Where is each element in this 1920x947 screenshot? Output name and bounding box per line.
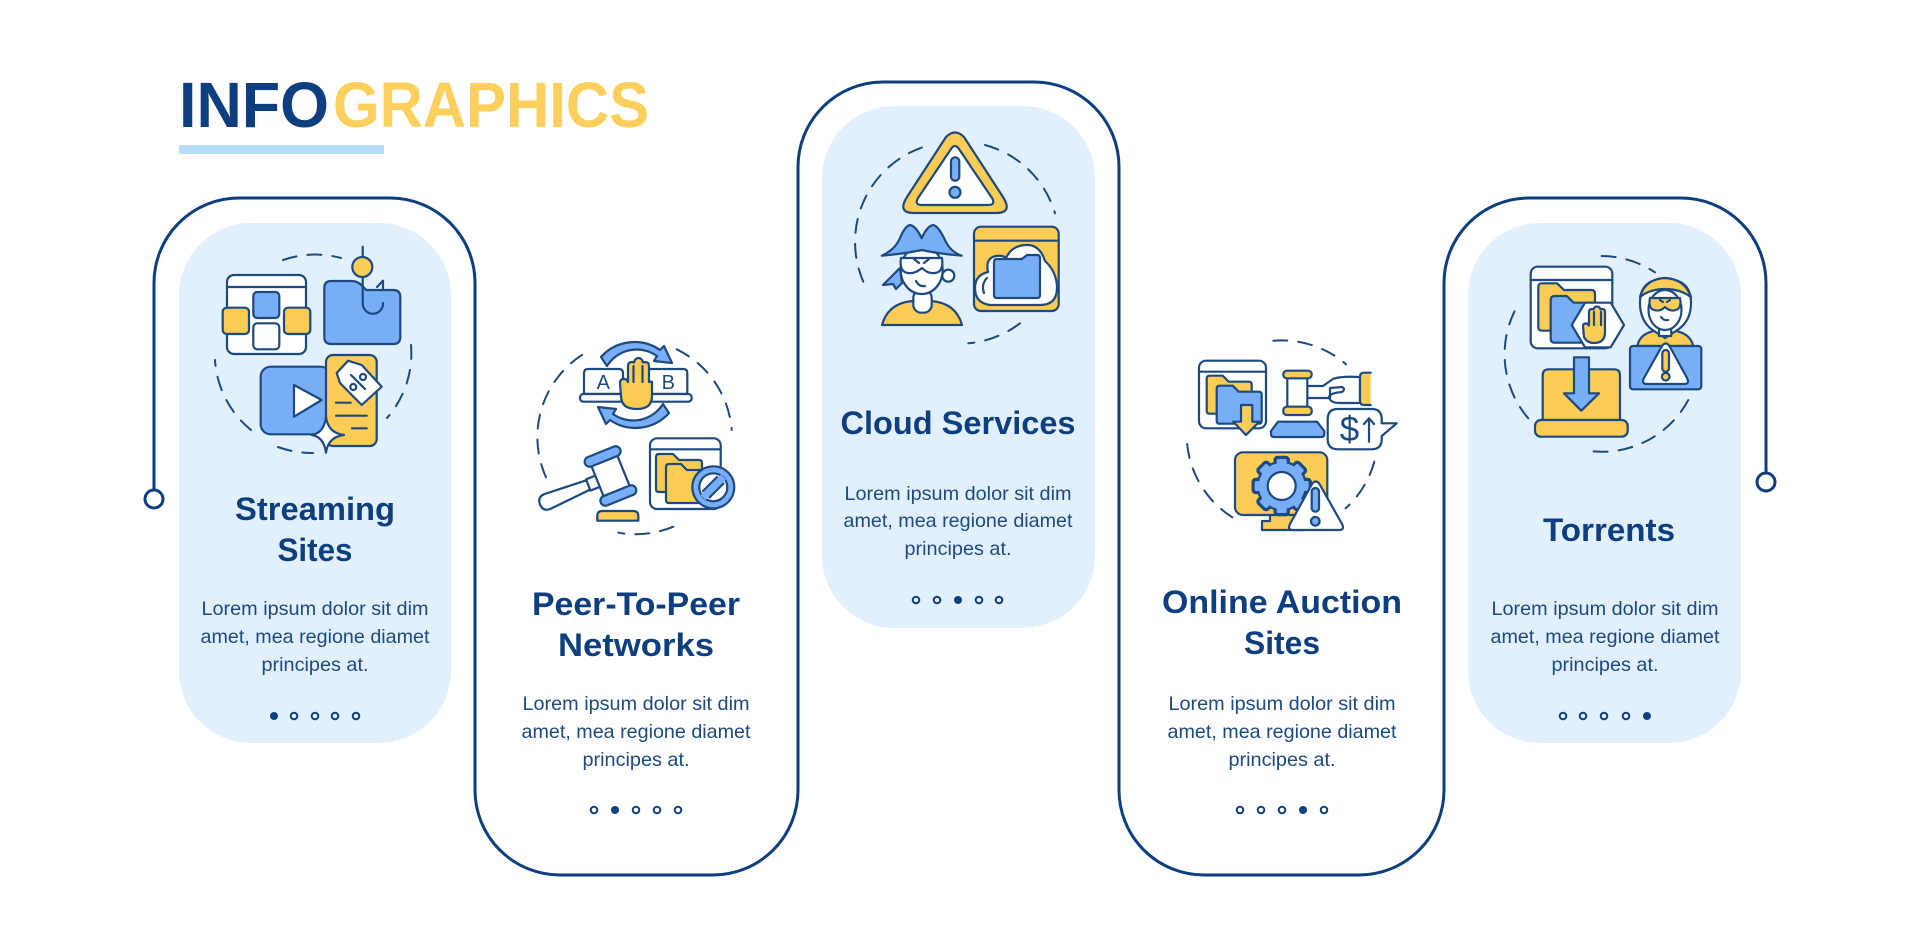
body text: Lorem ipsum dolor sit dim [1492, 598, 1718, 620]
body text: principes at. [1228, 749, 1336, 771]
heading: peer-to-peer networks: Networks [558, 627, 714, 663]
connecting outline [145, 82, 1775, 875]
icon: online auction: $ [1340, 410, 1359, 449]
body text: amet, mea regione diamet [200, 626, 430, 648]
icon: peer-to-peer: B [662, 372, 675, 394]
title [179, 69, 649, 141]
card backgrounds [179, 106, 1741, 743]
body text: amet, mea regione diamet [1168, 721, 1397, 743]
heading: cloud services: Cloud Services [840, 405, 1076, 441]
icon: online auction [1187, 340, 1397, 530]
body text: amet, mea regione diamet [1490, 626, 1720, 648]
icon: cloud services [855, 132, 1059, 343]
pagination dots [591, 806, 681, 814]
heading: torrents: Torrents [1543, 512, 1675, 548]
body text: amet, mea regione diamet [844, 510, 1073, 532]
heading: online auction sites: Online Auction [1162, 584, 1402, 620]
icon: torrents [1505, 256, 1701, 452]
body text: Lorem ipsum dolor sit dim [522, 693, 750, 715]
body text: Lorem ipsum dolor sit dim [844, 483, 1072, 505]
title underline [179, 145, 384, 154]
pagination dots [1237, 806, 1327, 814]
body text: Lorem ipsum dolor sit dim [202, 598, 428, 620]
body text: principes at. [1552, 654, 1658, 676]
body text: principes at. [904, 538, 1012, 560]
body text: principes at. [582, 749, 690, 771]
icon: peer-to-peer: A [597, 372, 611, 394]
pagination dots [270, 712, 359, 720]
panel: torrents [1490, 256, 1720, 720]
pagination dots [1560, 712, 1651, 720]
panel: online auction sites [1162, 340, 1402, 814]
title: INFO [179, 69, 329, 141]
icon: streaming sites [215, 247, 411, 453]
panel: streaming sites [200, 247, 430, 720]
heading: streaming sites: Sites [278, 532, 352, 568]
heading: streaming sites: Streaming [235, 491, 395, 527]
icon: peer-to-peer [530, 342, 734, 534]
body text: amet, mea regione diamet [522, 721, 751, 743]
body text: Lorem ipsum dolor sit dim [1168, 693, 1396, 715]
panel: peer-to-peer networks [522, 342, 751, 814]
title: GRAPHICS [333, 69, 649, 141]
heading: peer-to-peer networks: Peer-To-Peer [532, 586, 740, 622]
pagination dots [913, 596, 1002, 604]
body text: principes at. [262, 654, 368, 676]
panel: cloud services [840, 132, 1076, 604]
heading: online auction sites: Sites [1244, 625, 1320, 661]
